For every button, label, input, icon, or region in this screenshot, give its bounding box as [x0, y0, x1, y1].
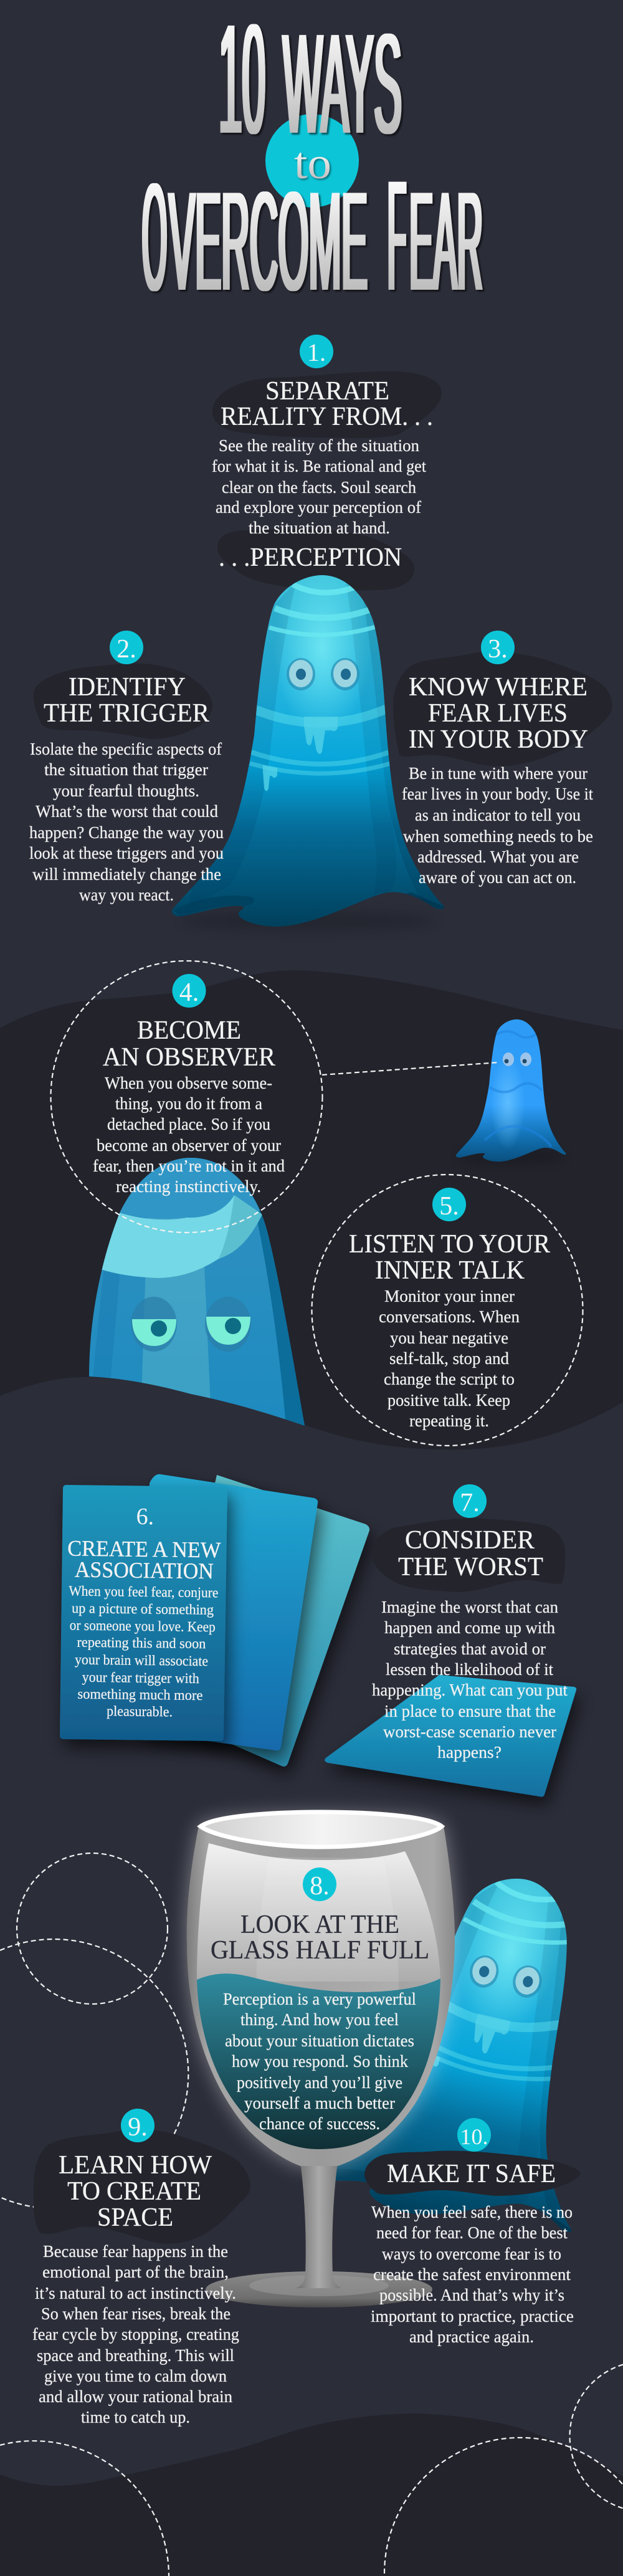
body 2: look at these triggers and you	[29, 844, 224, 862]
dark wave background: steps 4 and 5	[0, 970, 623, 1450]
ghost behind the glass: step 10 illustration	[302, 1832, 623, 2251]
heading 9: SPACE	[97, 2203, 173, 2232]
body 3: aware of you can act on.	[419, 868, 576, 887]
body 9: time to catch up.	[81, 2408, 190, 2426]
body 1: clear on the facts. Soul search	[222, 478, 416, 497]
body 9: Because fear happens in the	[43, 2242, 228, 2261]
body 6: pleasurable.	[107, 1703, 173, 1720]
body 8: yourself a much better	[244, 2094, 395, 2112]
number badge 4: 4.	[179, 978, 199, 1007]
dashed decorative circles: footer	[0, 2365, 623, 2576]
body 2: your fearful thoughts.	[53, 781, 199, 800]
body 3: addressed. What you are	[417, 847, 579, 866]
body 2: happen? Change the way you	[29, 823, 224, 842]
body 2: What’s the worst that could	[36, 802, 218, 821]
body 8: chance of success.	[259, 2114, 380, 2133]
front card	[60, 1485, 227, 1741]
body 4: become an observer of your	[97, 1136, 281, 1155]
heading 8: GLASS HALF FULL	[211, 1936, 429, 1965]
body 5: conversations. When	[379, 1307, 520, 1326]
blob 2	[34, 664, 212, 739]
wine	[197, 1973, 440, 2149]
body 4: detached place. So if you	[107, 1115, 270, 1133]
title lines: 10 ways, overcome fear	[142, 0, 483, 323]
number badge 5	[432, 1188, 466, 1221]
number badge 4	[172, 974, 206, 1008]
body 7: in place to ensure that the	[384, 1702, 556, 1720]
body 2: way you react.	[79, 885, 174, 904]
heading 7	[398, 1526, 543, 1581]
blob 9	[34, 2130, 250, 2244]
body 5: change the script to	[384, 1370, 515, 1388]
number badge 9: 9.	[128, 2113, 148, 2142]
body 5: you hear negative	[390, 1329, 508, 1347]
heading 5	[349, 1230, 550, 1285]
body 2: the situation that trigger	[44, 760, 208, 779]
step 4: become an observer	[51, 961, 323, 1233]
blob 7	[371, 1518, 565, 1592]
number badge 2	[110, 631, 143, 664]
ghost illustration: step 1 to 3	[172, 561, 449, 927]
glass inner light	[197, 1843, 440, 1982]
body 10: create the safest environment	[373, 2265, 571, 2284]
body 9: space and breathing. This will	[37, 2346, 234, 2365]
step 1 background blobs	[212, 371, 442, 590]
body 5: positive talk. Keep	[388, 1391, 510, 1410]
word: to: to	[294, 138, 331, 188]
body 7	[372, 1598, 568, 1762]
body 9: and allow your rational brain	[39, 2387, 232, 2406]
body 4: When you observe some-	[105, 1074, 272, 1092]
blob 10	[364, 2151, 581, 2196]
heading 7: THE WORST	[398, 1553, 543, 1581]
body 7: happen and come up with	[384, 1618, 555, 1637]
heading 5: LISTEN TO YOUR	[349, 1230, 550, 1259]
heading 3	[409, 673, 588, 754]
wine glass stem	[297, 2162, 341, 2288]
heading 9: TO CREATE	[67, 2177, 201, 2206]
body 2: Isolate the specific aspects of	[30, 740, 222, 758]
heading 8: LOOK AT THE	[240, 1911, 399, 1939]
heading 6	[67, 1535, 221, 1583]
body 7: worst-case scenario never	[383, 1722, 556, 1741]
body 1	[212, 436, 426, 537]
body 8: Perception is a very powerful	[223, 1990, 416, 2008]
number badge 9	[121, 2109, 155, 2142]
heading 1: REALITY FROM. . .	[221, 403, 433, 431]
body 5: repeating it.	[409, 1411, 489, 1430]
heading 1 continued: . . .PERCEPTION	[219, 543, 402, 572]
ghost shadow	[181, 911, 436, 931]
heading 3: IN YOUR BODY	[409, 725, 588, 754]
step 9: learn how to create space	[32, 2109, 250, 2426]
blob 3	[393, 652, 612, 766]
body 8	[223, 1990, 416, 2133]
number badge 1: 1.	[307, 338, 326, 366]
card behind step 7	[325, 1675, 576, 1797]
body 8: thing. And how you feel	[240, 2010, 399, 2029]
number badge 8: 8.	[310, 1872, 330, 1901]
step 7: consider the worst	[325, 1484, 576, 1797]
dashed circle 4	[51, 961, 323, 1233]
body 6: something much more	[77, 1686, 203, 1703]
body 10: ways to overcome fear is to	[382, 2244, 561, 2263]
glass reflection	[257, 1857, 399, 1994]
glass rim	[201, 1812, 442, 1847]
body 10	[371, 2203, 574, 2346]
number badge 10: 10.	[460, 2124, 488, 2149]
heading 8	[211, 1911, 429, 1965]
body 9: So when fear rises, break the	[41, 2304, 231, 2323]
middle card	[143, 1474, 318, 1750]
body 9: fear cycle by stopping, creating	[32, 2325, 239, 2344]
heading 2: IDENTIFY	[69, 673, 186, 702]
dashed decorative circles: left of glass	[0, 1853, 188, 2208]
number 6: 6.	[136, 1504, 154, 1530]
back card	[162, 1475, 369, 1767]
card text	[65, 1502, 221, 1720]
step 3: know where fear lives in your body	[393, 631, 612, 887]
heading 2: THE TRIGGER	[44, 699, 209, 728]
heading 9	[59, 2151, 212, 2232]
glass glow	[187, 1814, 455, 2166]
body 9	[32, 2242, 239, 2426]
body 3: as an indicator to tell you	[415, 806, 581, 824]
heading 6: ASSOCIATION	[75, 1557, 214, 1583]
heading 4	[103, 1016, 275, 1072]
body 1: for what it is. Be rational and get	[212, 457, 426, 475]
body 4	[93, 1074, 285, 1196]
body 8: about your situation dictates	[225, 2031, 414, 2050]
dashed circle 5	[312, 1175, 583, 1446]
wine glass foot	[206, 2271, 432, 2307]
body 7: happening. What can you put	[372, 1681, 568, 1699]
title lines: 10 ways, overcome fear: O	[142, 151, 167, 322]
body 7: strategies that avoid or	[394, 1639, 546, 1658]
body 9: emotional part of the brain,	[42, 2263, 229, 2281]
body 10: important to practice, practice	[371, 2307, 574, 2326]
body 5: Monitor your inner	[384, 1287, 515, 1305]
body 8: how you respond. So think	[232, 2052, 408, 2071]
number badge 2: 2.	[117, 635, 136, 664]
heading 2	[44, 673, 209, 728]
body 3	[402, 764, 593, 887]
body 5	[379, 1287, 520, 1430]
heading 6: CREATE A NEW	[67, 1535, 221, 1562]
body 2	[29, 740, 224, 904]
body 5: self-talk, stop and	[389, 1349, 509, 1368]
heading 1	[221, 377, 433, 431]
heading 4: BECOME	[137, 1016, 241, 1045]
body 2: will immediately change the	[32, 865, 221, 884]
body 10: When you feel safe, there is no	[371, 2203, 573, 2221]
step 6: stack of cards	[60, 1474, 369, 1767]
heading 4: AN OBSERVER	[103, 1043, 275, 1072]
body 6: repeating this and soon	[77, 1634, 206, 1651]
body 1: and explore your perception of	[216, 498, 421, 517]
body 10: and practice again.	[409, 2327, 534, 2346]
body 9: it’s natural to act instinctively.	[35, 2284, 236, 2302]
heading 1: SEPARATE	[265, 377, 389, 406]
heading 10: MAKE IT SAFE	[387, 2160, 556, 2188]
title lines: 10 ways, overcome fear: F	[388, 148, 406, 323]
big ghost eyes	[131, 1297, 251, 1352]
step 5: listen to your inner talk	[312, 1175, 583, 1446]
body 3: fear lives in your body. Use it	[402, 785, 593, 803]
body 1: the situation at hand.	[249, 518, 390, 537]
body 4: fear, then you’re not in it and	[93, 1157, 285, 1175]
title	[142, 0, 483, 323]
body 1: See the reality of the situation	[219, 436, 419, 455]
number badge 7	[453, 1484, 487, 1518]
body 7: lessen the likelihood of it	[386, 1660, 553, 1679]
dashed connector from circle 4 to small ghost	[322, 1062, 498, 1075]
heading 5: INNER TALK	[375, 1256, 525, 1285]
body 3: when something needs to be	[403, 827, 593, 846]
number badge 7: 7.	[460, 1489, 480, 1517]
number badge 1	[300, 335, 333, 368]
body 9: give you time to calm down	[44, 2367, 227, 2385]
dark wave background: footer	[0, 2413, 623, 2576]
number badge 8	[303, 1868, 336, 1901]
heading 9: LEARN HOW	[59, 2151, 212, 2180]
heading 3: FEAR LIVES	[428, 699, 568, 728]
number badge 5: 5.	[439, 1192, 459, 1221]
circle behind the word to	[265, 114, 359, 208]
body 3: Be in tune with where your	[409, 764, 587, 783]
step 8: glass with text	[187, 1812, 455, 2166]
number badge 3: 3.	[488, 635, 508, 664]
body 6: your brain will associate	[75, 1652, 208, 1669]
body 6: or someone you love. Keep	[70, 1618, 216, 1634]
body 6: your fear trigger with	[82, 1669, 199, 1686]
big ghost peeking: step 4 illustration	[89, 1158, 305, 1426]
body 6: When you feel fear, conjure	[69, 1583, 219, 1600]
body 10: need for fear. One of the best	[376, 2223, 568, 2242]
body 4: thing, you do it from a	[115, 1094, 262, 1113]
small ghost observer	[456, 1019, 566, 1162]
step 10: make it safe	[364, 2118, 581, 2346]
body 8: positively and you’ll give	[237, 2073, 402, 2092]
ghost eyes	[287, 658, 359, 690]
step 2: identify the trigger	[29, 631, 224, 904]
body 7: happens?	[437, 1743, 502, 1762]
body 6	[67, 1583, 219, 1720]
heading 3: KNOW WHERE	[409, 673, 587, 702]
number badge 10	[457, 2118, 491, 2152]
glass bowl	[187, 1826, 455, 2166]
body 6: up a picture of something	[72, 1600, 214, 1618]
body 4: reacting instinctively.	[116, 1177, 261, 1196]
heading 7: CONSIDER	[405, 1526, 535, 1555]
body 7: Imagine the worst that can	[381, 1598, 558, 1616]
body 10: possible. And that’s why it’s	[379, 2286, 564, 2304]
number badge 3	[481, 631, 515, 664]
step 1: separate reality from perception	[212, 335, 433, 572]
